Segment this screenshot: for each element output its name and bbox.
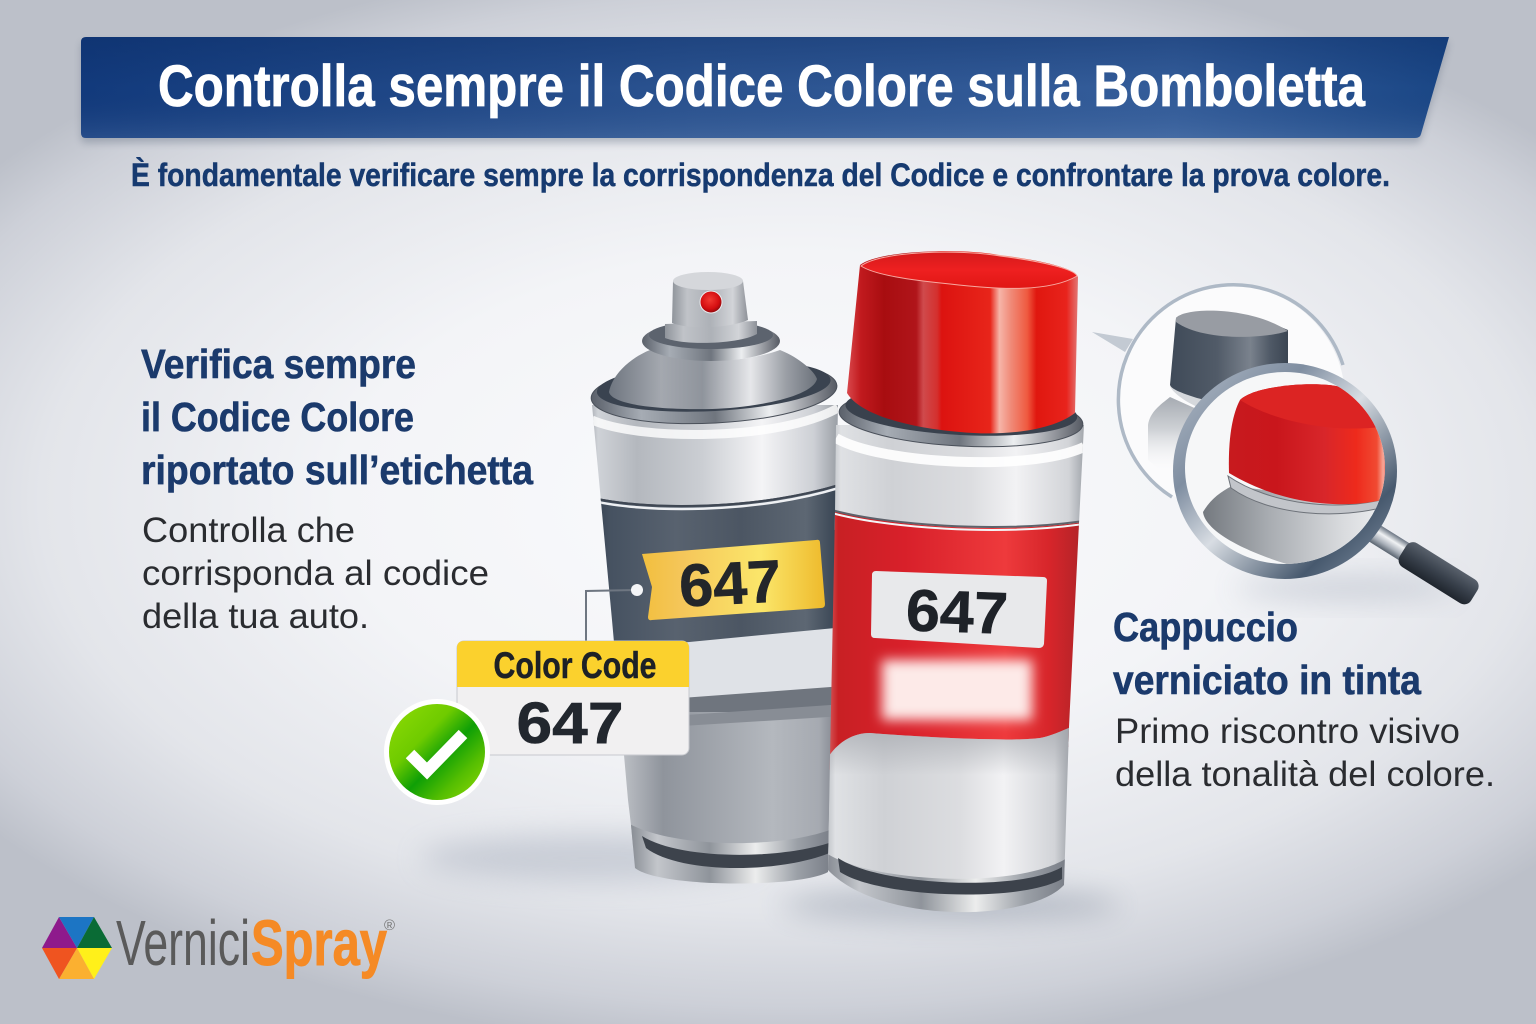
can rim: [590, 355, 839, 429]
icon: green check: [384, 699, 490, 805]
right heading: Cappuccio: [1113, 604, 1298, 650]
left body text: corrisponda al codice: [142, 554, 489, 593]
right body text: Primo riscontro visivo: [1115, 712, 1460, 751]
color code callout box: [457, 641, 689, 756]
white code label: [871, 571, 1047, 648]
speech bubble with grey cap: [1092, 285, 1345, 512]
left heading: Verifica sempre: [141, 341, 416, 387]
callout label: Color Code: [494, 645, 656, 686]
title text: Controlla sempre il Codice Colore sulla Bomboletta: [158, 54, 1366, 119]
callout yellow header: [457, 641, 689, 687]
yellow code label: [642, 540, 825, 620]
red can rim: [838, 381, 1084, 452]
red spray can: [820, 251, 1090, 925]
red cap: [847, 251, 1078, 433]
subtitle: È fondamentale verificare sempre la corrispondenza del Codice e confrontare la prova colore.: [131, 157, 1390, 193]
magnifier shadow: [1235, 578, 1455, 598]
can body bands: [585, 400, 845, 890]
icon: colour hexagon: [42, 917, 112, 979]
title banner: [81, 37, 1449, 143]
logo wordmark: Vernici: [116, 907, 250, 979]
can dome: [609, 350, 817, 409]
can nozzle and ring: [642, 272, 780, 361]
grey spray can: [585, 272, 845, 890]
lens contents: [1185, 372, 1385, 564]
right heading: [1113, 604, 1422, 703]
left text block: [141, 341, 534, 636]
left body text: della tua auto.: [142, 597, 369, 636]
floor shadows: [420, 834, 1120, 921]
lens frame: [1173, 363, 1397, 579]
logo: [42, 907, 395, 979]
icon: red nozzle dot: [700, 291, 722, 313]
magnifier illustration: [1092, 285, 1482, 607]
yellow code label: 647: [677, 547, 783, 620]
callout number: 647: [516, 691, 624, 756]
right heading: verniciato in tinta: [1113, 657, 1422, 703]
left body text: [142, 511, 489, 636]
left heading: [141, 341, 534, 493]
right body text: della tonalità del colore.: [1115, 755, 1495, 794]
connector line: [586, 584, 643, 642]
logo wordmark: ®: [384, 917, 395, 934]
handle: [1362, 518, 1482, 607]
logo wordmark: [116, 907, 395, 979]
red can body bands: [820, 425, 1090, 925]
left heading: il Codice Colore: [141, 394, 414, 440]
right text block: [1113, 604, 1495, 794]
right body text: [1115, 712, 1495, 794]
logo wordmark: Spray: [251, 907, 387, 979]
left body text: Controlla che: [142, 511, 355, 550]
left heading: riportato sull’etichetta: [141, 447, 534, 493]
white code label: 647: [905, 577, 1009, 647]
